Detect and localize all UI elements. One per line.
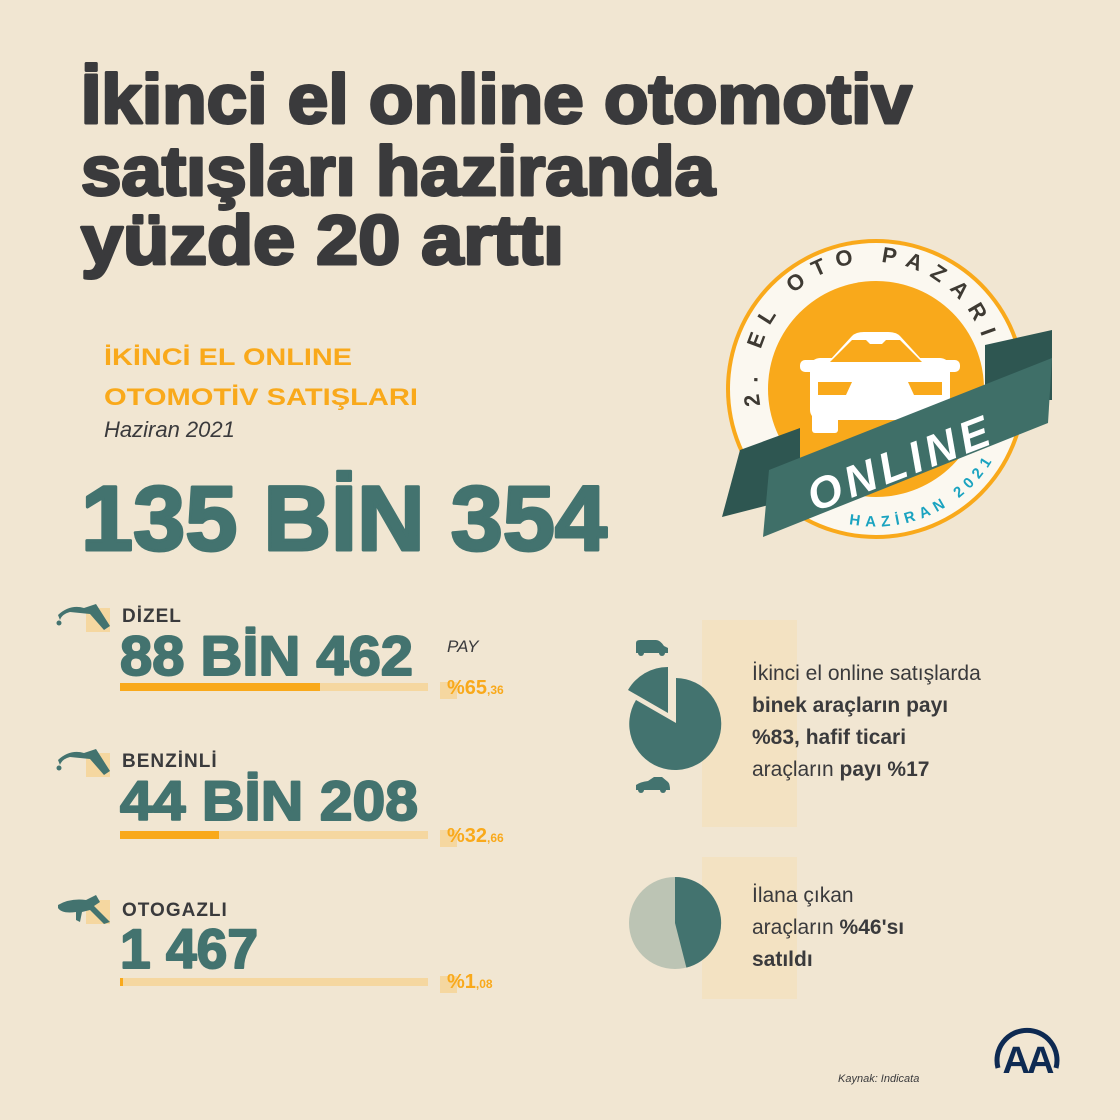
car icon	[800, 332, 960, 433]
subtitle: İKİNCİ EL ONLINE	[104, 344, 352, 371]
panel: otogazli: 1 467	[120, 917, 258, 980]
icon: fuel nozzle	[56, 604, 110, 632]
logo: AA: AA	[1003, 1040, 1054, 1082]
panel: benzinli	[56, 749, 504, 847]
title: İkinci el online otomotiv	[81, 60, 912, 138]
icon: lpg nozzle	[58, 895, 110, 924]
panel: vehicle type share: %83, hafif ticari	[752, 726, 906, 749]
panel: dizel: PAY	[447, 637, 480, 656]
panel: vehicle type share: araçların payı %17	[752, 758, 929, 781]
panel: benzinli: BENZİNLİ	[122, 751, 218, 772]
icon: car	[636, 777, 670, 790]
panel: benzinli: 44 BİN 208	[120, 769, 418, 832]
subtitle: OTOMOTİV SATIŞLARI	[104, 384, 418, 411]
panel: sold share: İlana çıkan	[752, 884, 854, 907]
ribbon	[722, 330, 1052, 537]
badge top text: 2. EL OTO PAZARI	[744, 247, 996, 406]
pie chart: binek vs hafif ticari	[628, 667, 721, 770]
panel: otogazli: %1,08	[447, 971, 493, 993]
badge bottom text: HAZİRAN 2021	[850, 458, 992, 527]
icon: fuel nozzle	[56, 749, 110, 777]
ribbon: ONLINE	[800, 405, 1001, 521]
panel: dizel	[56, 604, 504, 699]
panel: benzinli: %32,66	[447, 825, 504, 847]
pie chart: 46% sold	[629, 877, 721, 969]
panel: vehicle type share: binek araçların payı	[752, 694, 948, 717]
icon: van	[636, 640, 668, 653]
panel: sold share: araçların %46'sı	[752, 916, 904, 939]
title: satışları haziranda	[81, 132, 716, 210]
panel: vehicle type share: İkinci el online satışlarda	[752, 662, 981, 685]
title: yüzde 20 arttı	[81, 201, 564, 279]
total number: 135 BİN 354	[81, 468, 607, 570]
source: Kaynak: Indicata	[838, 1073, 919, 1085]
logo: AA	[997, 1030, 1057, 1082]
badge	[722, 239, 1052, 539]
panel: otogazli: OTOGAZLI	[122, 900, 228, 921]
panel: dizel: DİZEL	[122, 606, 182, 627]
panel: otogazli	[58, 895, 493, 993]
subtitle	[104, 344, 418, 442]
panel: dizel: %65,36	[447, 677, 504, 699]
panel: vehicle type share	[628, 620, 987, 827]
panel: dizel: 88 BİN 462	[120, 624, 413, 687]
subtitle: Haziran 2021	[104, 417, 235, 442]
title	[81, 60, 912, 279]
panel: sold share	[629, 857, 910, 999]
panel: sold share: satıldı	[752, 948, 813, 971]
